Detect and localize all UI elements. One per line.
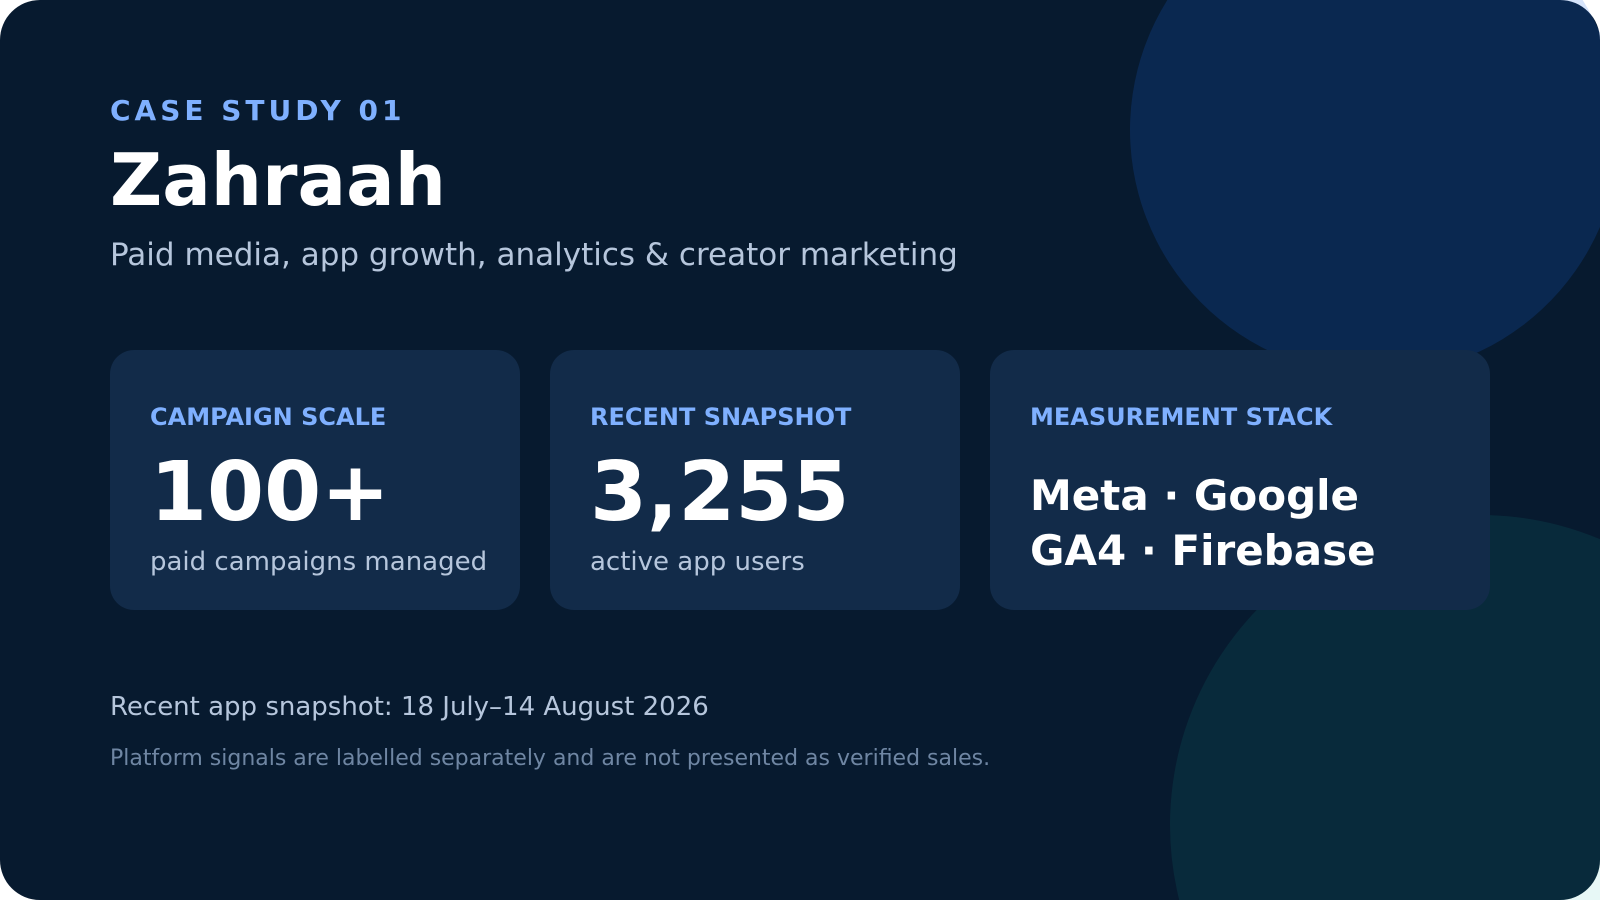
stat: 3,255: 3,255 (590, 445, 849, 540)
subtitle: Paid media, app growth, analytics & creator marketing (110, 237, 958, 273)
label: campaign scale: CAMPAIGN SCALE (150, 403, 386, 431)
eyebrow: CASE STUDY 01 (110, 94, 405, 127)
panel: campaign scale (110, 350, 520, 610)
snapshot date note: Recent app snapshot: 18 July–14 August 2026 (110, 692, 709, 722)
label: recent snapshot: RECENT SNAPSHOT (590, 403, 852, 431)
caption: paid campaigns managed: paid campaigns managed (150, 547, 487, 577)
stack line 1: Meta · Google (1030, 471, 1359, 520)
decorative blue circle (1130, 0, 1600, 375)
title: Zahraah (110, 138, 446, 222)
stat: 100+: 100+ (150, 445, 390, 540)
decorative teal circle (1170, 515, 1600, 900)
stack line 2: GA4 · Firebase (1030, 526, 1376, 575)
panel: measurement stack (990, 350, 1490, 610)
label: measurement stack: MEASUREMENT STACK (1030, 403, 1334, 431)
caption: active app users: active app users (590, 547, 805, 577)
panel: recent snapshot (550, 350, 960, 610)
disclaimer: Platform signals are labelled separately and are not presented as verified sales. (110, 746, 990, 771)
header block (110, 94, 958, 273)
